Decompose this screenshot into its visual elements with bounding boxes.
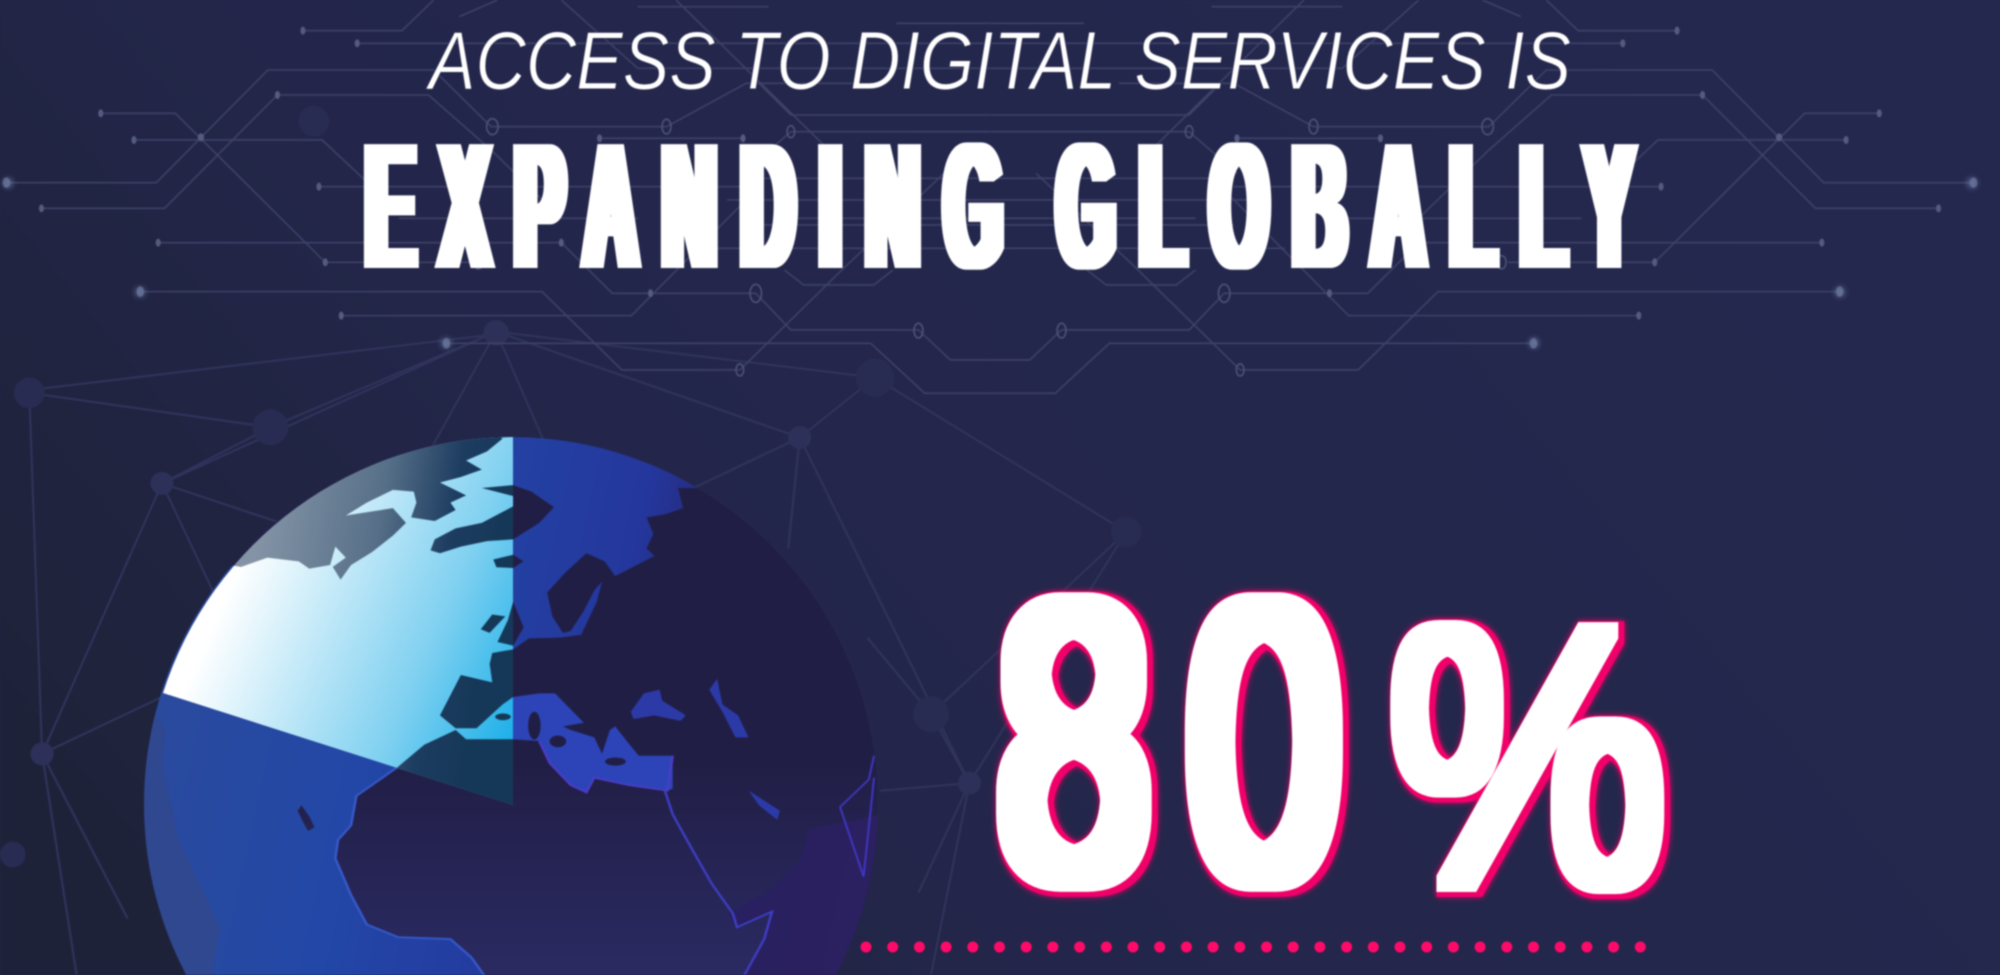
statistic: 80% bbox=[997, 521, 1668, 963]
dotted pink divider bbox=[866, 942, 1641, 952]
wedge: highlighted 80 percent slice bbox=[162, 436, 514, 806]
network mesh background bbox=[0, 106, 1142, 974]
digits 80: 8 bbox=[997, 521, 1151, 963]
digits 80: 0 bbox=[1187, 521, 1341, 963]
heading: line 1: ACCESS TO DIGITAL SERVICES IS bbox=[425, 14, 1571, 107]
circuit board lines background bbox=[3, 0, 1977, 393]
soft node glows bbox=[3, 178, 1977, 348]
digits 80 bbox=[997, 521, 1341, 963]
icon: faint americas on globe edge bbox=[121, 690, 681, 975]
coastlines and inner seas bbox=[335, 679, 874, 975]
heading: line 2: EXPANDING GLOBALLY bbox=[366, 107, 1634, 307]
globe with pie wedge bbox=[143, 436, 878, 975]
globe ocean bbox=[140, 430, 880, 975]
globe land masses bbox=[232, 439, 878, 975]
percent sign: % bbox=[1387, 550, 1668, 962]
